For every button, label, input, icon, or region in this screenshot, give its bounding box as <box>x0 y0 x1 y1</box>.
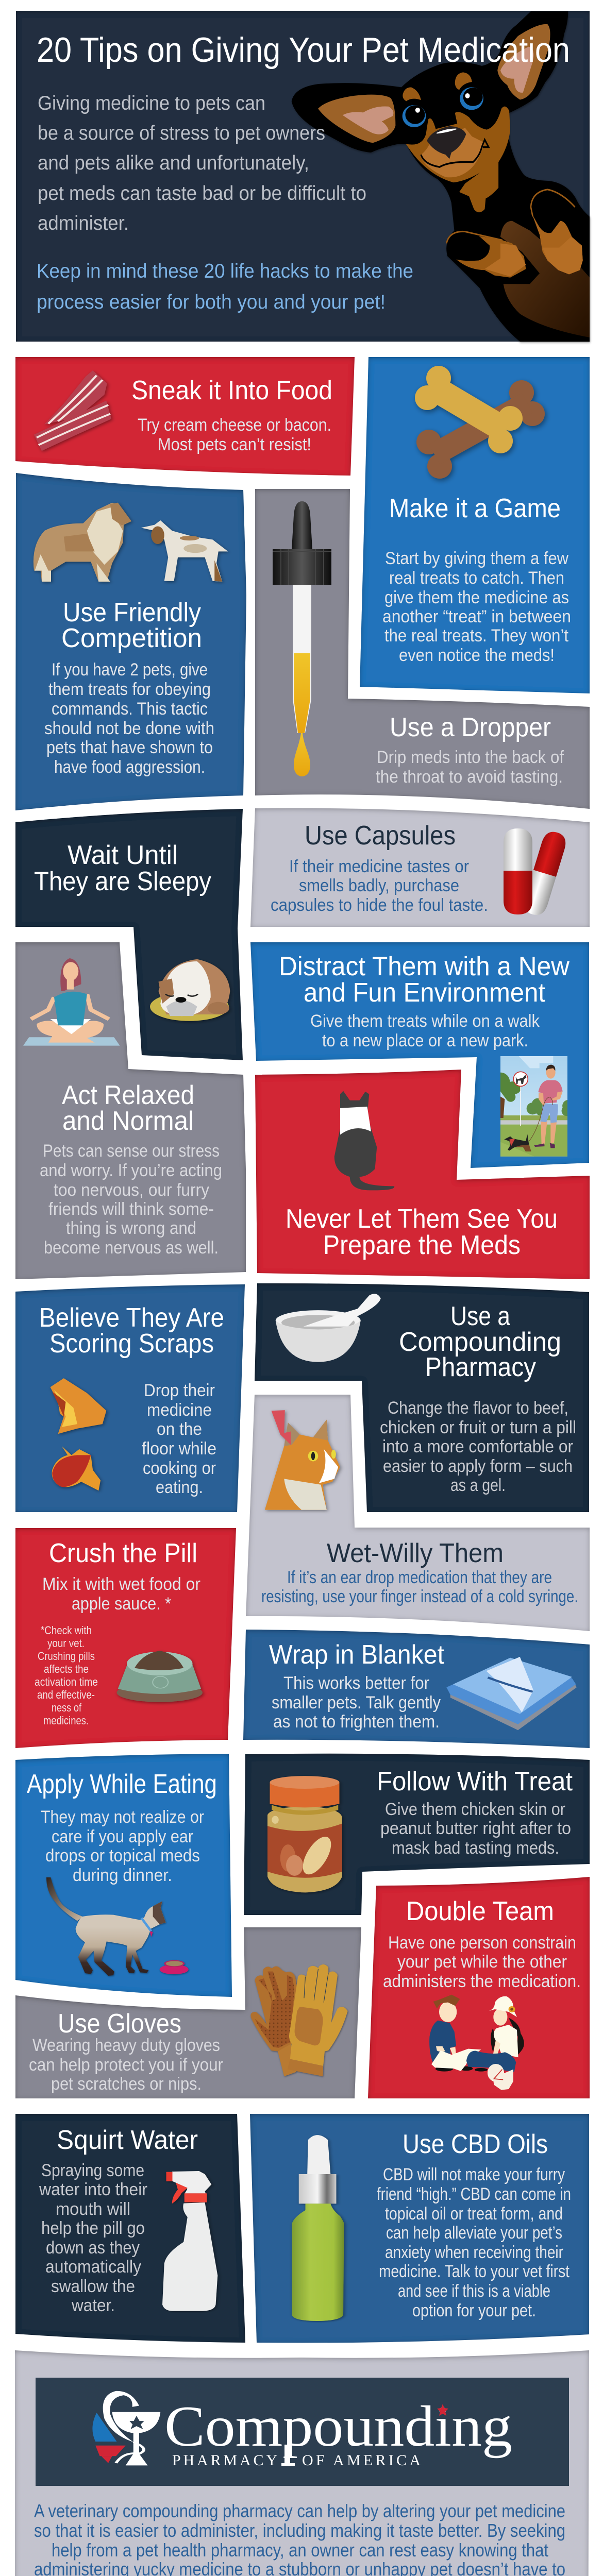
body text: Wearing heavy duty gloves <box>32 2036 220 2055</box>
heading: Compounding <box>399 1327 561 1357</box>
heading <box>286 1204 558 1260</box>
body text: as not to frighten them. <box>273 1712 440 1732</box>
body text: swallow the <box>51 2277 135 2296</box>
panel: wait until they are sleepy <box>15 809 243 1060</box>
body text: topical oil or treat form, and <box>385 2204 563 2224</box>
body text: anxiety when receiving their <box>385 2243 563 2262</box>
heading: Sneak it Into Food <box>131 376 332 405</box>
heading: Use Capsules <box>305 821 456 851</box>
heading: Pharmacy <box>425 1352 536 1382</box>
heading <box>399 1301 561 1382</box>
body text: during dinner. <box>73 1866 172 1885</box>
body text: Most pets can’t resist! <box>158 435 311 454</box>
body text: This works better for <box>283 1673 429 1693</box>
body text: have food aggression. <box>54 757 205 777</box>
heading: Distract Them with a New <box>279 952 569 981</box>
body text: medicine <box>147 1400 212 1420</box>
body text: should not be done with <box>44 719 214 738</box>
heading: Wait Until <box>68 840 178 870</box>
heading <box>61 598 202 653</box>
body text: pets that have shown to <box>46 738 213 757</box>
heading: Wrap in Blanket <box>269 1640 445 1670</box>
heading <box>62 1080 194 1136</box>
icon: bacon <box>34 370 111 451</box>
body text: help the pill go <box>41 2218 145 2238</box>
body text: them treats for obeying <box>48 680 211 699</box>
icon: mortar and pestle <box>276 1294 381 1362</box>
footnote: Crushing pills <box>38 1650 95 1663</box>
panel: act relaxed and normal <box>15 942 246 1279</box>
body text: pet scratches or nips. <box>51 2074 202 2094</box>
footnote: activation time <box>35 1675 98 1688</box>
footnote: *Check with <box>41 1624 92 1637</box>
icon: peanut butter jar <box>267 1776 342 1892</box>
panel: sneak it into food <box>15 357 355 476</box>
icon: siamese cat eating <box>46 1877 189 1976</box>
body text: Try cream cheese or bacon. <box>138 415 331 435</box>
icon: food scraps <box>51 1378 106 1490</box>
body text: friends will think some- <box>48 1199 214 1219</box>
icon: capsules <box>504 828 568 918</box>
heading: Follow With Treat <box>377 1767 573 1797</box>
body text: water into their <box>39 2180 147 2199</box>
panel: follow with treat <box>244 1754 590 1915</box>
heading: and Normal <box>62 1106 194 1136</box>
body text: Change the flavor to beef, <box>388 1398 568 1418</box>
panel: believe they are scoring scraps <box>15 1284 245 1512</box>
heading: Never Let Them See You <box>286 1204 558 1234</box>
body text: your pet while the other <box>397 1952 567 1972</box>
heading: Believe They Are <box>39 1303 224 1333</box>
body text: Spraying some <box>41 2161 144 2180</box>
icon: food bowl <box>116 1651 203 1702</box>
panel: apply while eating <box>15 1754 232 1997</box>
heading: Apply While Eating <box>27 1769 217 1799</box>
panel: wrap in blanket <box>243 1630 590 1748</box>
panel: squirt water <box>15 2114 245 2343</box>
body text <box>376 748 564 787</box>
closing paragraph <box>34 2500 565 2576</box>
body text: apple sauce. * <box>72 1594 171 1614</box>
body text <box>380 1398 576 1495</box>
panel: make it a game <box>360 357 590 693</box>
panel: use capsules <box>250 808 590 927</box>
heading: Make it a Game <box>389 494 561 523</box>
body text <box>310 1011 540 1050</box>
body text <box>138 415 331 454</box>
body text: mask bad tasting meds. <box>392 1838 559 1858</box>
body text: cooking or <box>143 1459 216 1478</box>
footnote: and effective- <box>37 1688 95 1701</box>
body text: thing is wrong and <box>66 1218 196 1238</box>
icon: meditating woman <box>23 958 120 1046</box>
logo subtitle left: PHARMACY <box>172 2452 277 2469</box>
body text: down as they <box>46 2238 140 2258</box>
heading: Use Gloves <box>58 2009 181 2039</box>
logo descender <box>281 2445 295 2466</box>
body text: administers the medication. <box>383 1972 581 1991</box>
body text: If it’s an ear drop medication that they are <box>287 1568 552 1587</box>
body text: even notice the meds! <box>399 646 555 665</box>
body text: and see if this is a viable <box>398 2281 550 2301</box>
heading: Use Friendly <box>63 598 201 628</box>
body text: the throat to avoid tasting. <box>376 767 563 787</box>
body text: Start by giving them a few <box>385 549 568 568</box>
heading: Competition <box>61 623 202 653</box>
icon: gloves <box>250 1964 348 2076</box>
body text: care if you apply ear <box>52 1827 193 1846</box>
body text: another “treat” in between <box>382 607 571 626</box>
panel: use a compounding pharmacy <box>255 1283 589 1512</box>
panel: use cbd oils <box>250 2114 589 2343</box>
callout text: process easier for both you and your pet! <box>37 291 386 313</box>
icon: orange cat with ear arrow <box>265 1410 340 1510</box>
body text: smaller pets. Talk gently <box>272 1693 441 1713</box>
callout text <box>37 260 413 313</box>
body text: chicken or fruit or turn a pill <box>380 1418 576 1437</box>
panel: hero introduction <box>16 11 590 342</box>
heading: Scoring Scraps <box>49 1329 214 1359</box>
heading <box>34 840 211 896</box>
illustration: two people holding a puppy <box>429 1995 524 2090</box>
body text: give them the medicine as <box>384 588 569 607</box>
footnote: medicines. <box>43 1714 89 1727</box>
body text: Drop their <box>144 1381 215 1400</box>
body text <box>272 1673 441 1732</box>
logo: compounding pharmacy of america <box>36 2378 569 2486</box>
body text <box>380 1800 571 1858</box>
body text <box>382 549 571 665</box>
body text: into a more comfortable or <box>382 1437 573 1456</box>
body text: commands. This tactic <box>52 699 208 719</box>
body text <box>39 2161 147 2315</box>
heading <box>279 952 569 1008</box>
body text: Give them chicken skin or <box>385 1800 565 1819</box>
icon: dropper <box>273 501 331 776</box>
logo symbol <box>92 2391 160 2465</box>
heading <box>39 1303 224 1359</box>
body text: can help protect you if your <box>29 2055 223 2075</box>
heading: Use a <box>450 1301 510 1331</box>
body text <box>40 1141 222 1258</box>
intro text: pet meds can taste bad or be difficult to <box>38 182 366 205</box>
icon: two dogs <box>34 503 228 582</box>
callout text: Keep in mind these 20 life hacks to make the <box>37 260 413 282</box>
icon: cat from behind <box>334 1091 394 1190</box>
body text: mouth will <box>56 2199 130 2219</box>
icon: spray bottle <box>162 2171 217 2311</box>
body text: as a gel. <box>450 1476 506 1495</box>
body text: become nervous as well. <box>44 1238 219 1258</box>
heading: Wet-Willy Them <box>327 1538 504 1568</box>
heading: Prepare the Meds <box>323 1230 521 1260</box>
body text <box>44 660 214 777</box>
body text: drops or topical meds <box>45 1846 200 1866</box>
intro text: and pets alike and unfortunately, <box>38 152 309 174</box>
body text: If you have 2 pets, give <box>52 660 208 680</box>
body text: real treats to catch. Then <box>389 568 564 588</box>
panel: use gloves <box>15 1927 361 2098</box>
heading: and Fun Environment <box>304 978 546 1008</box>
heading: Crush the Pill <box>49 1538 197 1568</box>
heading: Double Team <box>406 1896 554 1926</box>
body text: too nervous, our furry <box>54 1180 209 1200</box>
panel: use a dropper <box>255 489 590 809</box>
body text: Drip meds into the back of <box>377 748 564 767</box>
footnote <box>35 1624 98 1727</box>
illustration: dachshund dog <box>292 11 590 342</box>
body text <box>383 1933 581 1991</box>
body text: Pets can sense our stress <box>43 1141 220 1161</box>
body text <box>377 2165 571 2320</box>
heading: Act Relaxed <box>62 1080 194 1110</box>
body text: Have one person constrain <box>388 1933 576 1953</box>
body text: option for your pet. <box>412 2301 536 2320</box>
icon: sleeping bulldog <box>150 959 230 1021</box>
body text: to a new place or a new park. <box>322 1031 528 1050</box>
intro text: administer. <box>38 212 129 234</box>
body text: and worry. If you’re acting <box>40 1161 222 1180</box>
body text: on the <box>157 1419 202 1439</box>
body text <box>29 2036 223 2094</box>
panel: never let them see you prepare the meds <box>255 1070 590 1279</box>
logo subtitle right: OF AMERICA <box>302 2452 421 2469</box>
body text <box>261 1568 578 1606</box>
body text: Mix it with wet food or <box>42 1574 200 1594</box>
body text: If their medicine tastes or <box>289 857 469 876</box>
body text: the real treats. They won’t <box>384 626 568 646</box>
body text: medicine. Talk to your vet first <box>379 2262 569 2281</box>
panel: compounding pharmacy footer <box>15 2350 589 2576</box>
heading: Squirt Water <box>57 2125 198 2155</box>
body text: water. <box>71 2296 115 2315</box>
body text: easier to apply form – such <box>383 1456 573 1476</box>
intro text: be a source of stress to pet owners <box>38 122 325 144</box>
panel: distract them <box>250 942 589 1168</box>
panel: use friendly competition <box>15 473 246 810</box>
body text: capsules to hide the foul taste. <box>271 895 488 915</box>
body text <box>142 1381 216 1497</box>
heading: They are Sleepy <box>34 867 211 896</box>
illustration: man walking dog in park <box>500 1056 567 1157</box>
logo red star <box>437 2404 448 2416</box>
intro text <box>38 92 366 234</box>
icon: crossed bones <box>415 366 545 479</box>
panel: double team <box>368 1877 590 2098</box>
body text <box>42 1574 200 1614</box>
body text: floor while <box>142 1439 216 1459</box>
panel: wet-willy them <box>246 1395 590 1631</box>
body text: CBD will not make your furry <box>383 2165 565 2184</box>
body text: peanut butter right after to <box>380 1819 571 1838</box>
footnote: ness of <box>52 1701 82 1714</box>
footnote: affects the <box>44 1663 89 1675</box>
intro text: Giving medicine to pets can <box>38 92 265 114</box>
body text: automatically <box>45 2257 141 2277</box>
body text: They may not realize or <box>41 1807 204 1827</box>
icon: folded blanket <box>446 1657 577 1730</box>
icon: cbd oil bottle <box>292 2135 344 2321</box>
heading: Use CBD Oils <box>403 2129 548 2159</box>
body text: eating. <box>156 1478 203 1497</box>
footnote: your vet. <box>47 1637 85 1650</box>
body text: Give them treats while on a walk <box>310 1011 540 1031</box>
panel: crush the pill <box>15 1528 236 1748</box>
body text <box>41 1807 204 1885</box>
body text <box>271 857 488 915</box>
body text: can help alleviate your pet’s <box>386 2223 562 2243</box>
body text: smells badly, purchase <box>299 876 459 895</box>
heading: Use a Dropper <box>390 713 551 742</box>
logo wordmark: Compounding <box>164 2395 512 2459</box>
